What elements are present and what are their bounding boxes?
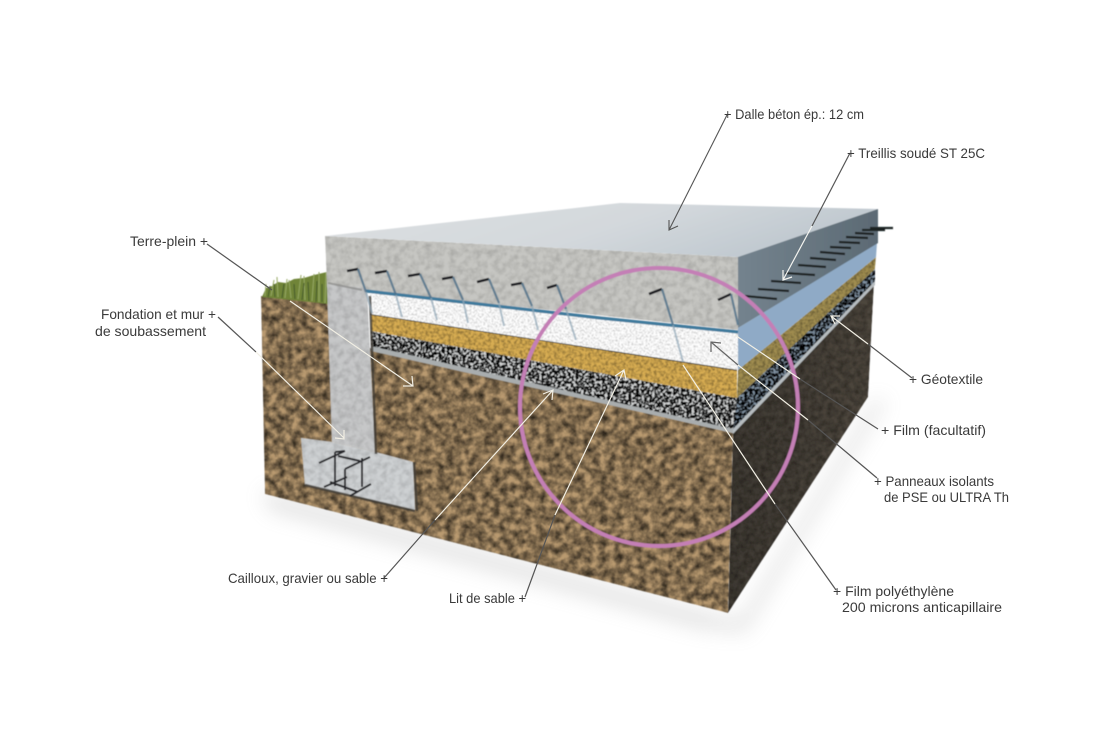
pink highlight circle — [520, 268, 798, 546]
label: Fondation et mur de soubassement: de soubassement — [95, 323, 206, 339]
label: Cailloux: Cailloux, gravier ou sable + — [228, 570, 388, 586]
label: Fondation et mur de soubassement — [95, 306, 216, 339]
layer: sand bed — [370, 257, 876, 398]
leader: Fondation — [218, 317, 344, 439]
label: Panneaux isolants — [874, 473, 1009, 505]
concrete slab front face — [325, 236, 738, 330]
layer: insulation panels — [370, 243, 877, 370]
front rebar hooks — [347, 269, 738, 362]
label: Treillis soudé: + Treillis soudé ST 25C — [847, 145, 985, 161]
right rebars — [745, 228, 893, 299]
label: Lit de sable: Lit de sable + — [449, 590, 526, 606]
label: Film facultatif: + Film (facultatif) — [881, 422, 986, 438]
concrete slab top — [325, 203, 878, 257]
footing — [301, 296, 417, 511]
label: Terre-plein: Terre-plein + — [130, 233, 208, 249]
soil right side — [728, 283, 874, 613]
illustration block — [261, 203, 893, 613]
wall and slab joint — [328, 283, 362, 290]
leader: Treillis soudé — [783, 153, 850, 280]
leader: Panneaux isolants — [711, 342, 877, 478]
grass — [262, 272, 329, 304]
label: Dalle béton: + Dalle béton ép.: 12 cm — [724, 106, 864, 122]
label: Fondation et mur de soubassement: Fondation et mur + — [101, 306, 216, 322]
label: Géotextile: + Géotextile — [909, 371, 983, 387]
label: Film polyéthylène — [833, 583, 1002, 615]
label: Panneaux isolants: de PSE ou ULTRA Th — [884, 489, 1009, 505]
label: Film polyéthylène: 200 microns anticapillaire — [842, 599, 1002, 615]
label: Panneaux isolants: + Panneaux isolants — [874, 473, 994, 489]
leader: Terre-plein — [207, 244, 413, 386]
footing rebar cage — [319, 451, 371, 496]
ground shadow — [262, 400, 886, 632]
leader: Film polyéthylène — [683, 365, 836, 590]
foundation wall — [327, 284, 375, 452]
layer: polyethylene film — [371, 281, 875, 434]
leader: Cailloux — [384, 390, 553, 578]
leader: Dalle béton — [669, 115, 727, 230]
concrete slab right side — [738, 209, 878, 328]
label: Film polyéthylène: + Film polyéthylène — [833, 583, 954, 599]
soil front face — [261, 296, 733, 613]
leader: Géotextile — [831, 316, 912, 378]
blue film line on insulation — [366, 291, 738, 332]
layer: gravel — [371, 268, 875, 430]
leader: Film facultatif — [735, 335, 878, 429]
leader: Lit de sable — [525, 370, 626, 597]
